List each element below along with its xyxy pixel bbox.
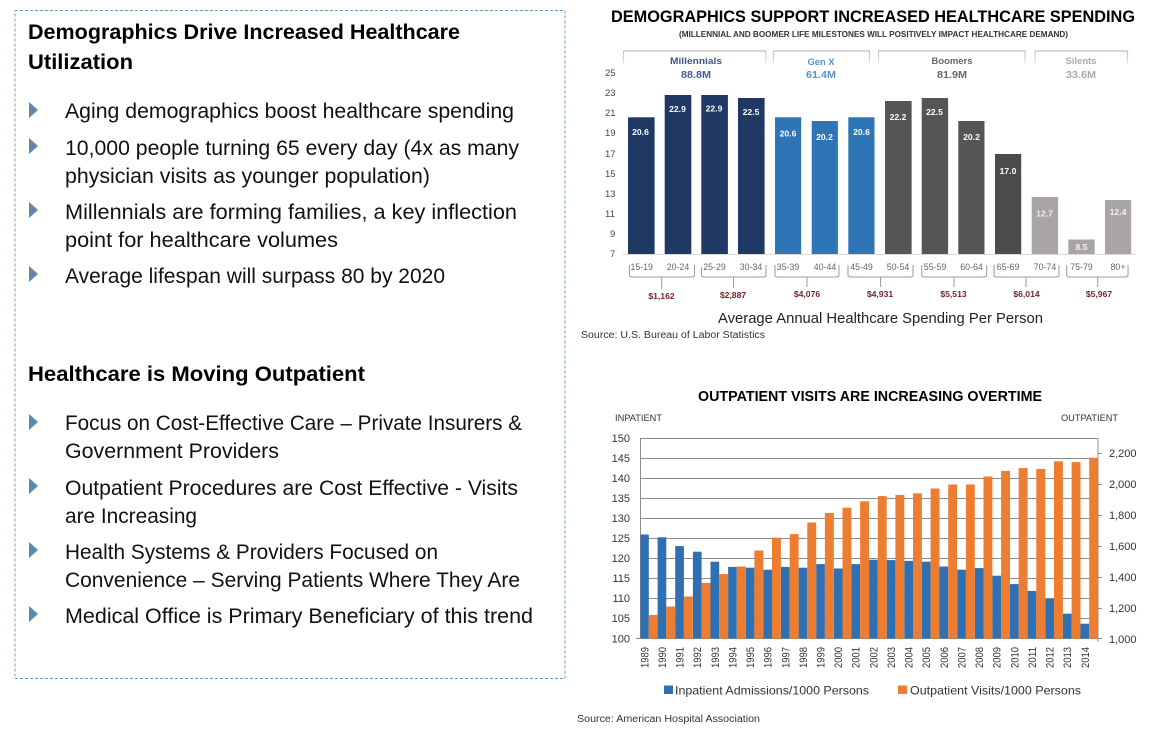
left axis labels: 125: [612, 533, 630, 545]
left axis labels: 150: [612, 433, 630, 445]
age group labels: 70-74: [1034, 262, 1056, 272]
spending brackets: [630, 265, 1128, 289]
year labels: 1995: [745, 647, 757, 668]
age group labels: 25-29: [703, 262, 726, 272]
age group labels: 75-79: [1070, 262, 1093, 272]
year labels: 2004: [904, 647, 916, 668]
year labels: 1999: [816, 647, 828, 668]
generation header: millennials: Millennials: [670, 56, 722, 67]
spending values: $6,014: [1013, 289, 1040, 299]
bullet: medical office: Medical Office is Primary Beneficiary of this trend: [65, 605, 533, 628]
bars: boomers: 20.2: [963, 132, 980, 142]
bars: silents: [1032, 197, 1131, 254]
chart title: outpatient visits: OUTPATIENT VISITS ARE INCREASING OVERTIME: [698, 389, 1042, 405]
source: hospital association: Source: American Hospital Association: [577, 714, 760, 725]
age group labels: 65-69: [997, 262, 1019, 272]
year labels: 1990: [657, 647, 669, 668]
year labels: 2006: [939, 647, 951, 668]
year labels: 1992: [692, 647, 704, 668]
y axis labels: 25: [605, 68, 616, 79]
generation header: silents: 33.6M: [1066, 69, 1096, 81]
bullet: convenience: Health Systems & Providers Focused on: [65, 541, 438, 564]
series: inpatient admissions: [640, 534, 1089, 638]
left axis labels: 130: [612, 513, 630, 525]
generation header: silents: Silents: [1066, 56, 1096, 67]
bullet: convenience: [29, 541, 520, 592]
bars: boomers: [885, 98, 1021, 254]
bullet: millennials: [29, 201, 517, 252]
spending values: $5,513: [940, 289, 967, 299]
generation header: gen x: Gen X: [808, 57, 835, 68]
age group labels: 55-59: [924, 262, 946, 272]
bars: gen x: [775, 117, 874, 254]
age group labels: 35-39: [777, 262, 799, 272]
left axis labels: 135: [612, 493, 630, 505]
year labels: 2002: [868, 647, 880, 668]
bar chart: healthcare spending by age: [605, 51, 1136, 301]
bars: gen x: 20.6: [853, 127, 870, 137]
left axis labels: 120: [612, 553, 630, 565]
heading: outpatient: Healthcare is Moving Outpatient: [28, 362, 365, 386]
bars: gen x: 20.6: [780, 128, 797, 138]
year labels: 2012: [1045, 647, 1057, 668]
age group labels: [630, 262, 1125, 272]
bars: millennials: 22.9: [669, 104, 686, 114]
left axis labels: 115: [612, 573, 630, 585]
generation header: gen x: 61.4M: [806, 69, 836, 81]
generation header: millennials: 88.8M: [681, 69, 711, 81]
source: labor statistics: Source: U.S. Bureau of Labor Statistics: [581, 330, 765, 341]
axis title: inpatient: INPATIENT: [615, 413, 663, 423]
generation header: silents: [1035, 51, 1128, 81]
age group labels: 50-54: [887, 262, 909, 272]
bars: boomers: 17.0: [1000, 166, 1017, 176]
age group labels: 80+: [1111, 262, 1125, 272]
heading: demographics: Utilization: [28, 50, 133, 74]
legend: inpatient: Inpatient Admissions/1000 Persons: [675, 684, 869, 698]
right axis labels: 2,000: [1109, 479, 1137, 491]
bullet: outpatient procedures: [29, 477, 518, 528]
generation header: gen x: [774, 51, 870, 81]
right axis labels: 1,800: [1109, 510, 1137, 522]
y axis labels: 13: [605, 189, 616, 200]
y axis labels: 15: [605, 169, 616, 180]
bars: boomers: 22.5: [926, 107, 943, 117]
generation header: boomers: Boomers: [932, 56, 972, 67]
bars: silents: 12.4: [1110, 207, 1127, 217]
bullet: outpatient procedures: are Increasing: [65, 505, 197, 528]
chart title: healthcare spending: DEMOGRAPHICS SUPPORT INCREASED HEALTHCARE SPENDING: [611, 8, 1135, 26]
bullet: convenience: Convenience – Serving Patients Where They Are: [65, 569, 520, 592]
year labels: 2010: [1009, 647, 1021, 668]
bullet: millennials: Millennials are forming families, a key inflection: [65, 201, 517, 224]
axis title: outpatient: OUTPATIENT: [1061, 413, 1119, 423]
year labels: 2008: [974, 647, 986, 668]
bullet: aging demographics: Aging demographics boost healthcare spending: [65, 100, 514, 123]
spending values: [648, 289, 1112, 301]
bars: silents: 12.7: [1036, 208, 1053, 218]
generation header: boomers: [878, 51, 1025, 81]
y axis labels: 19: [605, 128, 616, 139]
year labels: 1998: [798, 647, 810, 668]
year labels: 2000: [833, 647, 845, 668]
age group labels: 30-34: [740, 262, 762, 272]
year labels: 1991: [674, 647, 686, 668]
right axis labels: 1,000: [1109, 634, 1137, 646]
right axis labels: 1,200: [1109, 603, 1137, 615]
bars: millennials: 20.6: [632, 127, 649, 137]
age group labels: 40-44: [814, 262, 836, 272]
y axis labels: 23: [605, 88, 616, 99]
year labels: 1989: [639, 647, 651, 668]
right axis labels: [1109, 448, 1137, 646]
bullet: cost-effective care: [29, 412, 522, 463]
right axis labels: 1,400: [1109, 572, 1137, 584]
left axis labels: 100: [612, 634, 630, 646]
bullet: millennials: point for healthcare volumes: [65, 229, 338, 252]
year labels: 1996: [763, 647, 775, 668]
left axis labels: 145: [612, 453, 630, 465]
right axis labels: 1,600: [1109, 541, 1137, 553]
generation header: boomers: 81.9M: [937, 69, 967, 81]
year labels: 1994: [727, 647, 739, 668]
year labels: [639, 647, 1092, 668]
bullet: turning 65: [29, 137, 520, 188]
y axis labels: 7: [610, 249, 615, 260]
bullet: turning 65: physician visits as younger population): [65, 165, 430, 188]
age group labels: 20-24: [667, 262, 689, 272]
year labels: 2011: [1027, 647, 1039, 668]
year labels: 2005: [921, 647, 933, 668]
generation header: millennials: [624, 51, 766, 81]
left axis labels: 140: [612, 473, 630, 485]
year labels: 2001: [851, 647, 863, 668]
y axis labels: 21: [605, 108, 616, 119]
year labels: 2013: [1062, 647, 1074, 668]
bars: millennials: [628, 95, 765, 254]
year labels: 2009: [992, 647, 1004, 668]
chart title: healthcare spending: (MILLENNIAL AND BOOMER LIFE MILESTONES WILL POSITIVELY IMPACT HEALTHCARE DEMAND): [679, 30, 1068, 39]
heading: demographics: [28, 20, 460, 74]
year labels: 2007: [956, 647, 968, 668]
bullet: cost-effective care: Focus on Cost-Effective Care – Private Insurers &: [65, 412, 522, 435]
year labels: 1993: [710, 647, 722, 668]
bar chart: inpatient vs outpatient: [612, 413, 1137, 698]
bars: gen x: 20.2: [816, 132, 833, 142]
spending values: $4,076: [794, 289, 820, 299]
axis caption: spending per person: Average Annual Healthcare Spending Per Person: [718, 311, 1043, 327]
year labels: 1997: [780, 647, 792, 668]
left axis labels: [612, 433, 630, 646]
age group labels: 15-19: [630, 262, 653, 272]
series: outpatient visits: [649, 458, 1098, 638]
x axis baseline: [623, 254, 1136, 256]
spending values: $2,887: [720, 290, 746, 300]
chart title: healthcare spending: [611, 8, 1135, 39]
panel: text summary: [15, 10, 565, 678]
bullet: turning 65: 10,000 people turning 65 every day (4x as many: [65, 137, 520, 160]
bullet: cost-effective care: Government Providers: [65, 440, 279, 463]
year labels: 2003: [886, 647, 898, 668]
y axis labels: 17: [605, 149, 616, 160]
year labels: 2014: [1080, 647, 1092, 668]
spending values: $1,162: [648, 291, 675, 301]
left axis labels: 105: [612, 613, 630, 625]
left axis labels: 110: [612, 593, 630, 605]
bars: millennials: 22.5: [743, 107, 760, 117]
heading: demographics: Demographics Drive Increased Healthcare: [28, 20, 460, 44]
bars: silents: 8.5: [1076, 242, 1088, 252]
right axis labels: 2,200: [1109, 448, 1137, 460]
bars: boomers: 22.2: [890, 112, 907, 122]
y axis labels: 9: [610, 229, 615, 240]
legend: outpatient: Outpatient Visits/1000 Persons: [910, 684, 1081, 698]
spending values: $4,931: [867, 289, 893, 299]
age group labels: 45-49: [850, 262, 873, 272]
y axis labels: [605, 68, 616, 260]
bars: millennials: 22.9: [706, 104, 723, 114]
spending values: $5,967: [1086, 289, 1112, 299]
bullet: outpatient procedures: Outpatient Procedures are Cost Effective - Visits: [65, 477, 518, 500]
bullet: lifespan: Average lifespan will surpass 80 by 2020: [65, 265, 445, 288]
y axis labels: 11: [605, 209, 615, 220]
age group labels: 60-64: [960, 262, 983, 272]
